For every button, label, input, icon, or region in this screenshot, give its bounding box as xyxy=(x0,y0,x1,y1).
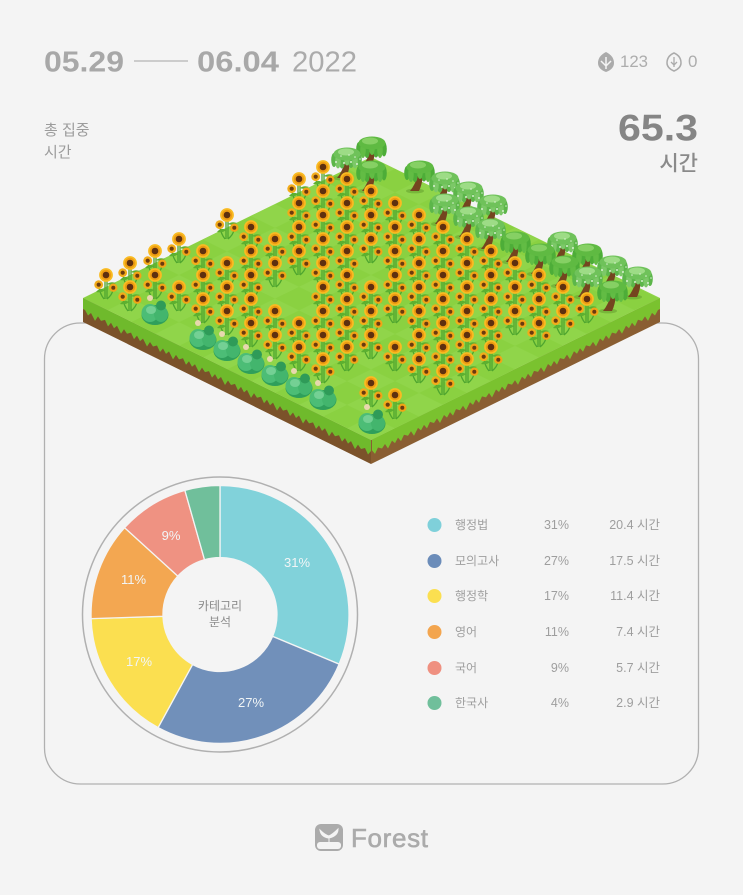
sunflowers xyxy=(94,160,599,419)
icon: healthy tree xyxy=(598,52,614,72)
total focus label: 시간 xyxy=(44,144,72,161)
legend row: 한국사: 4% xyxy=(551,696,569,710)
tree counts xyxy=(598,52,697,72)
willow trees xyxy=(331,136,653,313)
legend xyxy=(428,517,660,710)
Forest logo: Forest xyxy=(351,823,429,853)
donut chart xyxy=(82,477,358,752)
legend row: 영어: 7.4 시간 xyxy=(616,625,660,639)
slice percentages: 9% xyxy=(162,528,181,543)
legend row: 행정법 xyxy=(428,517,660,532)
legend row: 행정학: 17% xyxy=(544,589,569,603)
slice: 영어 11% xyxy=(91,528,178,619)
tree counts: 0 xyxy=(688,52,697,71)
slice percentages: 17% xyxy=(126,654,152,669)
chart center label: 카테고리 xyxy=(198,599,242,613)
date range heading: 05.29 xyxy=(44,46,124,78)
total focus label xyxy=(44,122,90,161)
legend row: 영어 xyxy=(428,625,660,639)
chart center label xyxy=(198,599,242,629)
total focus value: 시간 xyxy=(659,152,698,176)
legend row: 행정법: 20.4 시간 xyxy=(609,518,660,532)
field soil and grass sides xyxy=(83,298,660,464)
legend row: 국어 xyxy=(428,661,660,675)
icon: Forest app xyxy=(315,824,343,851)
slice percentages: 31% xyxy=(284,555,310,570)
legend row: 모의고사 xyxy=(428,554,660,568)
legend row: 국어: 9% xyxy=(551,661,569,675)
legend row: 모의고사: 17.5 시간 xyxy=(609,554,660,568)
legend row: 영어: 영어 xyxy=(455,625,477,639)
date range heading: 06.04 xyxy=(197,46,279,78)
slice percentages xyxy=(121,528,310,710)
legend row: 한국사 xyxy=(428,696,660,710)
chart center label: 분석 xyxy=(209,615,231,629)
legend row: 한국사: 한국사 xyxy=(455,696,488,710)
slice: 행정법 31% xyxy=(220,486,349,664)
legend row: 국어: 5.7 시간 xyxy=(616,661,660,675)
Forest logo xyxy=(315,823,429,853)
cabbages xyxy=(142,295,386,434)
legend row: 행정법: 행정법 xyxy=(455,517,488,532)
legend row: 행정학 xyxy=(428,588,660,603)
slice percentages: 27% xyxy=(238,695,264,710)
isometric forest field xyxy=(83,136,660,464)
slice percentages: 11% xyxy=(121,572,146,587)
date range heading xyxy=(44,46,357,78)
slice: 행정학 17% xyxy=(91,616,193,728)
total focus value: 65.3 xyxy=(618,108,698,148)
legend row: 행정학: 행정학 xyxy=(455,588,488,603)
legend row: 행정학: 11.4 시간 xyxy=(610,589,660,603)
legend row: 행정법: 31% xyxy=(544,518,569,532)
legend row: 영어: 11% xyxy=(545,625,569,639)
legend row: 모의고사: 모의고사 xyxy=(455,554,499,568)
field top surface xyxy=(83,157,660,440)
legend row: 모의고사: 27% xyxy=(544,554,569,568)
slice: 모의고사 27% xyxy=(158,636,339,743)
slice: 한국사 4% xyxy=(185,486,220,560)
tree counts: 123 xyxy=(620,52,648,71)
panel outline xyxy=(44,323,698,784)
total focus label: 총 집중 xyxy=(44,122,90,139)
slice: 국어 9% xyxy=(125,490,204,576)
total focus value xyxy=(618,108,698,176)
chart outer ring xyxy=(82,477,358,752)
icon: dead tree xyxy=(667,53,681,71)
legend row: 국어: 국어 xyxy=(455,661,477,675)
date range heading: 2022 xyxy=(292,46,357,78)
legend row: 한국사: 2.9 시간 xyxy=(616,696,660,710)
